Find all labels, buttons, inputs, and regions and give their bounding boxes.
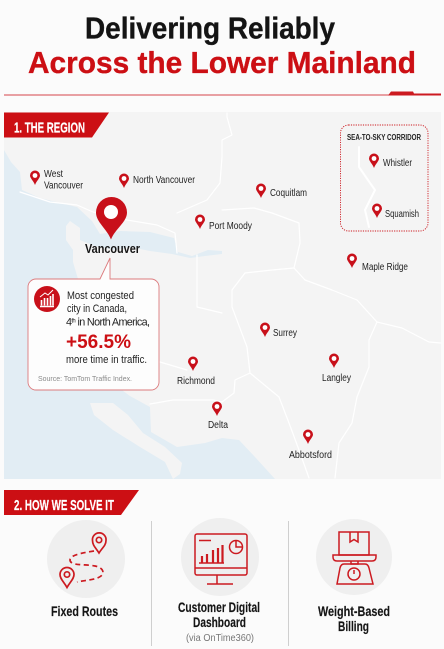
callout text: th — [71, 318, 76, 324]
label: Fixed Routes — [51, 604, 118, 619]
callout: sea-to-sky corridor — [340, 125, 428, 231]
icon: rising bar chart — [34, 286, 60, 312]
callout text: in North America, — [75, 316, 150, 328]
title: Across the Lower Mainland — [28, 46, 416, 80]
map water — [4, 150, 275, 479]
city labels: Delta — [208, 420, 228, 431]
column dividers — [151, 521, 289, 646]
city labels: Vancouver — [44, 180, 84, 192]
city labels: Surrey — [273, 328, 297, 339]
city labels: Langley — [322, 373, 351, 384]
callout text: more time in traffic. — [66, 354, 147, 366]
city labels: North Vancouver — [133, 175, 196, 186]
label: (via OnTime360) — [186, 633, 254, 644]
header rule — [4, 92, 441, 96]
section tag: the region: 1. THE REGION — [14, 120, 85, 136]
callout: sea-to-sky corridor: SEA-TO-SKY CORRIDOR — [347, 133, 421, 142]
title — [28, 12, 416, 80]
icon: route with two pins — [60, 533, 106, 588]
section tag: the region — [4, 112, 109, 138]
city labels: Whistler — [383, 158, 413, 169]
label: Customer Digital — [178, 600, 260, 615]
map roads — [20, 113, 441, 478]
panel: weight-based billing — [316, 519, 392, 634]
label — [178, 600, 260, 644]
label: Billing — [338, 619, 369, 634]
label: Weight-Based — [318, 604, 390, 619]
callout text: Most congested — [67, 290, 134, 302]
city labels: Richmond — [177, 376, 215, 387]
callout: congestion stat — [28, 258, 159, 390]
map land — [4, 112, 441, 479]
vancouver pin and label — [85, 197, 140, 256]
city labels: Squamish — [385, 209, 419, 220]
section tag: how we solve it: 2. HOW WE SOLVE IT — [14, 497, 114, 514]
icon: monitor dashboard — [195, 534, 247, 584]
title: Delivering Reliably — [85, 12, 335, 46]
icon: parcel on scale — [333, 532, 376, 584]
vancouver pin and label: Vancouver — [85, 241, 140, 256]
city labels — [44, 158, 419, 461]
city labels: Port Moody — [209, 221, 252, 232]
label: Dashboard — [193, 615, 246, 630]
city labels: Abbotsford — [289, 450, 332, 461]
panel: customer digital dashboard — [178, 518, 260, 644]
callout text: 4 — [66, 316, 72, 328]
city labels: West — [44, 169, 63, 180]
map island — [90, 403, 182, 479]
section tag: how we solve it — [4, 490, 139, 515]
callout text: city in Canada, — [67, 303, 127, 315]
callout text: Source: TomTom Traffic Index. — [38, 374, 132, 383]
panel: region map — [4, 112, 441, 479]
callout text: +56.5% — [66, 332, 131, 353]
city labels: Coquitlam — [270, 188, 307, 199]
city pins — [30, 154, 382, 444]
label — [318, 604, 390, 634]
panel: fixed routes — [47, 520, 125, 619]
city labels: Maple Ridge — [362, 262, 408, 273]
callout text — [38, 290, 150, 383]
